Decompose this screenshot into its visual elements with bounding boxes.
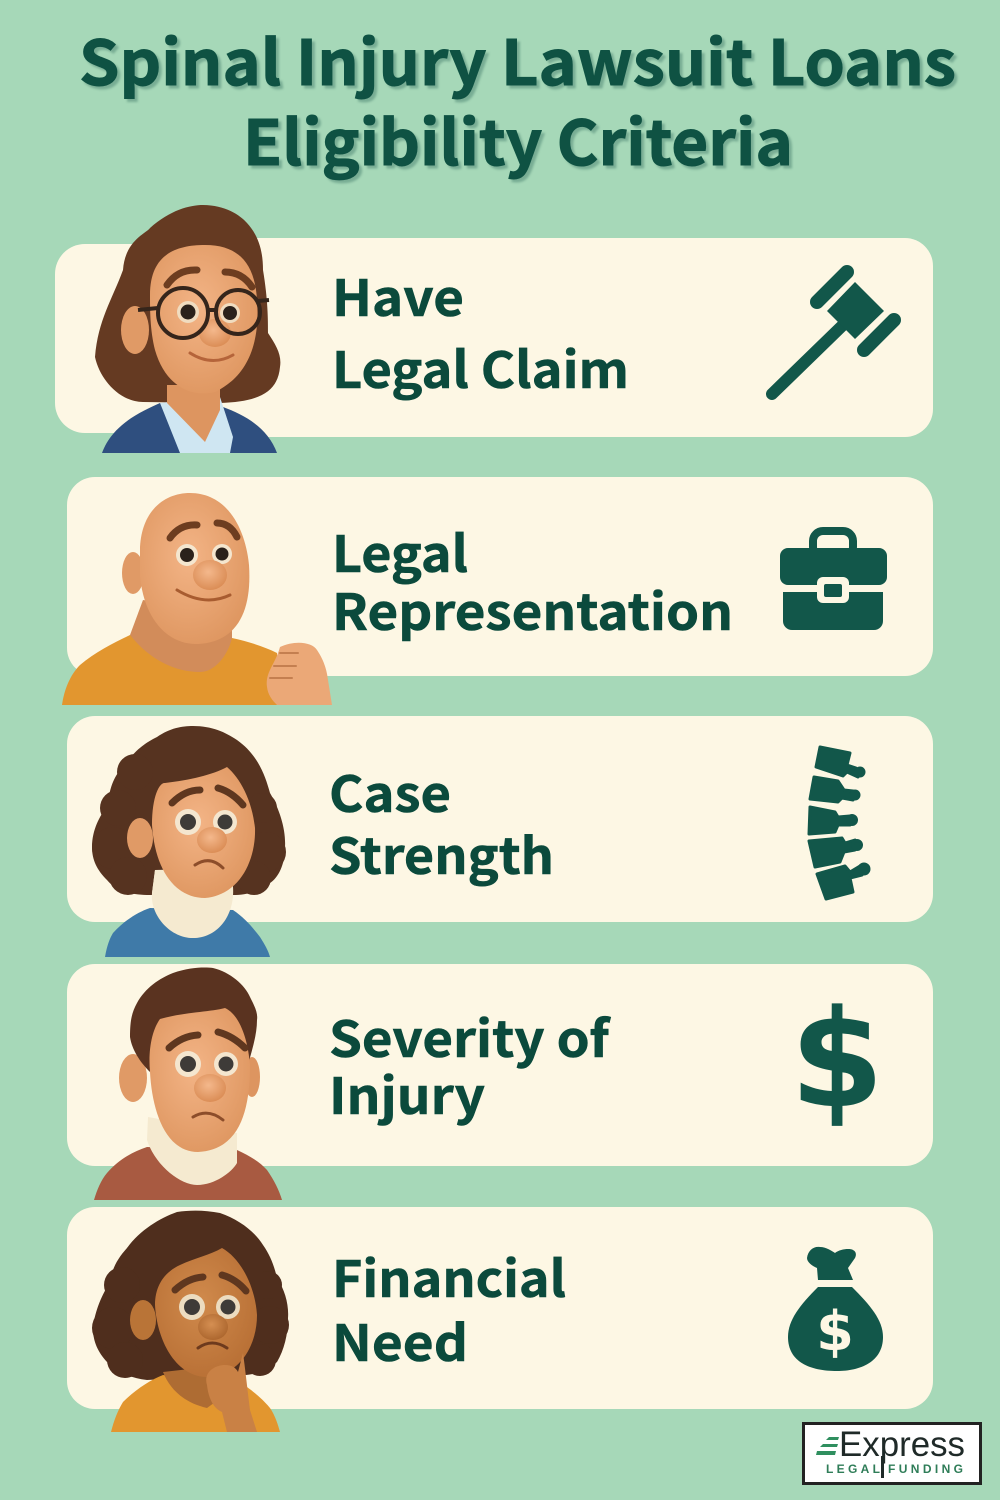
logo mark: speed lines [816,1437,839,1455]
heading: case strength [329,755,554,889]
character: woman with neck brace [92,726,286,957]
heading: legal representation [332,515,733,645]
panel: have legal claim [55,205,933,453]
heading: have legal claim: Legal Claim [332,331,629,403]
logo: express legal funding: LEGAL [826,1462,880,1476]
heading: financial need: Financial [332,1240,566,1312]
panel: case strength [67,716,933,957]
character: bald man [62,493,332,705]
icon: dollar sign: $ [790,981,884,1138]
heading: case strength: Case [329,755,451,827]
title: Eligibility Criteria [243,93,793,183]
logo: express legal funding [804,1424,980,1484]
heading: financial need [332,1240,566,1376]
heading: legal representation: Representation [332,573,733,645]
icon: spine [809,747,869,899]
character: thinking woman [92,1211,289,1432]
icon: gavel [772,272,894,394]
heading: have legal claim: Have [332,259,464,331]
panel: severity of injury [67,964,933,1200]
heading: have legal claim [332,259,629,403]
panel: financial need [67,1207,933,1432]
character: woman with glasses [95,205,280,453]
heading: severity of injury [329,1000,612,1129]
heading: severity of injury: Severity of [329,1000,612,1072]
heading: financial need: Need [332,1304,468,1376]
character: man with neck brace [94,968,282,1200]
heading: severity of injury: Injury [329,1057,485,1129]
title [79,13,956,183]
heading: legal representation: Legal [332,515,468,587]
logo: express legal funding: Express [839,1425,965,1464]
heading: case strength: Strength [329,817,554,889]
icon: briefcase [780,531,887,630]
icon: money bag: $ [816,1300,854,1363]
icon: money bag [788,1247,883,1371]
title: Spinal Injury Lawsuit Loans [79,13,956,103]
panel: legal representation [62,477,933,705]
logo: express legal funding: FUNDING [888,1462,963,1476]
